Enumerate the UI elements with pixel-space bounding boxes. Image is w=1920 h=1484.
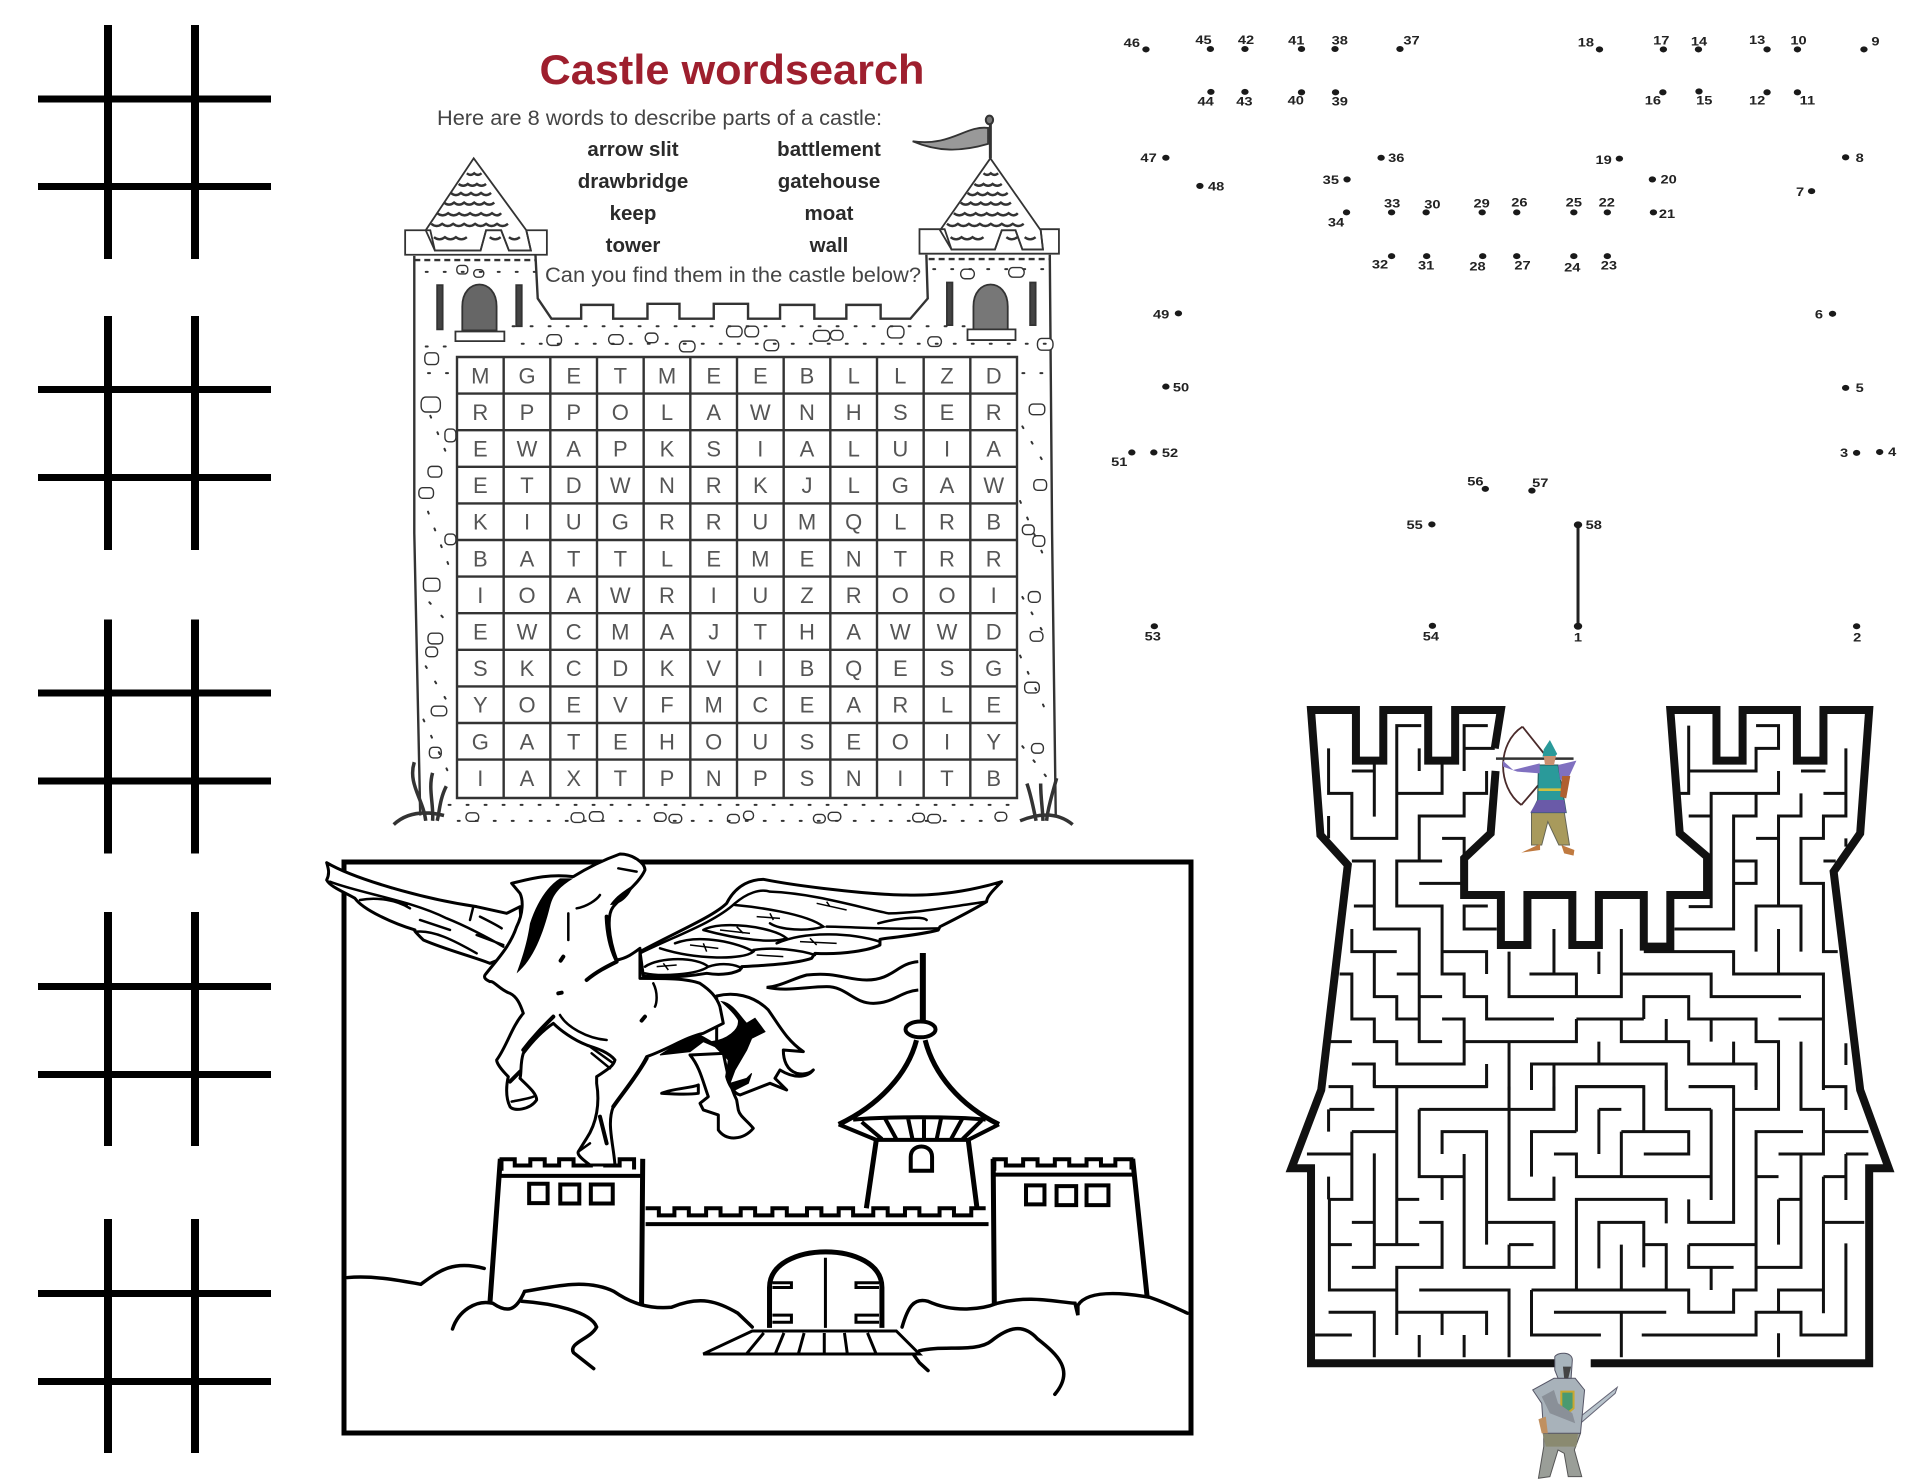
belt and quiver — [1538, 788, 1562, 791]
scabbard — [1538, 1417, 1548, 1433]
numbered dots: 3 — [1840, 446, 1848, 460]
panel: connect the dots — [1111, 33, 1897, 644]
right wing — [640, 879, 1002, 977]
panel: castle wordsearch — [394, 46, 1073, 825]
tail ink mass — [660, 1002, 765, 1090]
numbered dots: 10 — [1790, 34, 1807, 47]
numbered dots: 40 — [1288, 94, 1304, 107]
numbered dots: 7 — [1796, 185, 1804, 199]
word list: tower — [606, 234, 660, 257]
numbered dots: 35 — [1323, 173, 1340, 186]
turret flag — [767, 962, 918, 1003]
cuisses — [1542, 1430, 1578, 1447]
tower caps — [405, 229, 1059, 255]
castle wall speckle — [423, 269, 1048, 821]
numbered dots: 15 — [1696, 94, 1713, 107]
central turret — [866, 1141, 977, 1208]
numbered dots: 56 — [1467, 475, 1484, 488]
helmet — [1543, 740, 1557, 757]
numbered dots: 57 — [1532, 476, 1548, 490]
numbered dots: 53 — [1145, 630, 1161, 643]
numbered dots: 22 — [1599, 196, 1615, 209]
numbered dots: 18 — [1578, 36, 1595, 49]
castle wall outline — [414, 255, 1056, 815]
mane — [517, 878, 573, 973]
numbered dots: 52 — [1162, 446, 1178, 460]
numbered dots: 43 — [1236, 94, 1253, 108]
tail — [717, 994, 813, 1095]
letter grid: SKCDKVIBQESG — [473, 656, 1002, 681]
body — [485, 854, 723, 1165]
tic-tac-toe grid 4 — [38, 912, 271, 1146]
numbered dots: 50 — [1173, 381, 1189, 394]
numbered dots: 27 — [1514, 259, 1531, 272]
panel: pegasus colouring picture — [327, 854, 1191, 1433]
numbered dots: 21 — [1659, 207, 1676, 221]
left reeds — [394, 762, 446, 825]
torso — [1533, 1378, 1585, 1433]
numbered dots: 14 — [1691, 35, 1708, 48]
word list: drawbridge — [578, 170, 688, 193]
numbered dots: 44 — [1198, 94, 1214, 108]
pegasus left wing and body — [327, 854, 723, 1165]
numbered dots: 4 — [1888, 445, 1897, 459]
wordsearch title: Castle wordsearch — [540, 46, 924, 93]
numbered dots: 28 — [1469, 260, 1486, 273]
letter grid: ETDWNRKJLGAW — [473, 473, 1004, 498]
numbered dots: 46 — [1124, 36, 1140, 50]
letter grid: EWCMAJTHAWWD — [473, 620, 1002, 644]
bow — [1503, 727, 1544, 805]
numbered dots: 32 — [1372, 258, 1388, 271]
word list — [578, 138, 881, 257]
numbered dots: 55 — [1406, 518, 1423, 532]
numbered dots: 38 — [1332, 34, 1348, 47]
wordsearch question: Can you find them in the castle below? — [545, 264, 921, 287]
numbered dots: 31 — [1418, 259, 1435, 272]
numbered dots: 6 — [1815, 308, 1823, 321]
numbered dots: 1 — [1574, 631, 1583, 644]
letter grid: KIUGRRUMQLRB — [473, 510, 1001, 535]
left tower roof — [426, 158, 531, 251]
right reeds — [1020, 778, 1073, 825]
tunic — [1532, 765, 1566, 813]
tic-tac-toe grid 5 — [38, 1219, 271, 1453]
castle towers and wall — [490, 953, 1147, 1354]
numbered dots: 47 — [1140, 151, 1157, 165]
letter grid: MGETMEEBLLZD — [471, 363, 1002, 388]
word list: arrow slit — [587, 138, 679, 161]
letter grid lines — [457, 357, 1017, 798]
body ink details — [512, 868, 657, 1152]
stairs — [703, 1331, 919, 1354]
numbered dots: 54 — [1423, 630, 1440, 643]
tic-tac-toe grid 3 — [38, 620, 271, 854]
legs — [1538, 1433, 1582, 1478]
numbered dots: 41 — [1288, 34, 1305, 47]
numbered dots: 24 — [1564, 260, 1581, 274]
spur — [662, 1085, 698, 1094]
arms — [1542, 1390, 1575, 1423]
numbered dots: 11 — [1800, 94, 1816, 107]
numbered dots: 17 — [1653, 34, 1669, 47]
tower windows — [529, 1184, 1108, 1205]
helmet — [1555, 1353, 1572, 1378]
letter grid: IOAWRIUZROOI — [477, 583, 997, 608]
word list: keep — [610, 202, 656, 225]
word list: battlement — [777, 138, 881, 161]
numbered dots: 30 — [1424, 198, 1441, 211]
letter grid: BATTLEMENTRR — [473, 546, 1002, 571]
muzzle shadow — [610, 885, 633, 905]
numbered dots: 12 — [1749, 94, 1765, 107]
panel: castle maze — [1291, 710, 1889, 1478]
numbered dots: 33 — [1384, 197, 1400, 210]
archer — [1496, 727, 1576, 856]
letter grid: RPPOLAWNHSER — [472, 400, 1002, 425]
gate — [770, 1252, 882, 1328]
numbered dots: 58 — [1586, 518, 1602, 532]
numbered dots: 42 — [1238, 33, 1254, 46]
numbered dots: 23 — [1601, 259, 1617, 272]
illustrated castle frame — [394, 116, 1073, 825]
numbered dots: 48 — [1208, 179, 1225, 193]
numbered dots: 25 — [1566, 196, 1583, 209]
hind leg — [690, 1053, 753, 1138]
tic-tac-toe grid 2 — [38, 316, 271, 550]
arms — [1503, 761, 1576, 780]
left wing — [327, 863, 523, 963]
numbered dots: 9 — [1871, 35, 1880, 48]
hills — [348, 1265, 1187, 1394]
numbered dots: 2 — [1853, 631, 1861, 644]
picture frame — [344, 862, 1191, 1433]
sword — [1575, 1387, 1617, 1423]
numbered dots: 8 — [1856, 151, 1864, 165]
maze upper inner walls — [1329, 726, 1846, 1090]
castle stones — [419, 265, 1053, 823]
pegasus hind leg, tail and right wing — [640, 879, 1002, 1138]
numbered dots: 51 — [1111, 455, 1128, 469]
numbered dots: 45 — [1195, 33, 1212, 46]
numbered dots: 26 — [1511, 196, 1528, 209]
numbered dots: 19 — [1596, 153, 1612, 167]
letter grid: GATEHOUSEOIY — [472, 729, 1001, 754]
letter grid: EWAPKSIALUIA — [473, 436, 1001, 462]
wing feather marks — [657, 902, 847, 970]
numbered dots: 39 — [1332, 94, 1348, 108]
letter grid: YOEVFMCEARLE — [473, 693, 1001, 718]
numbered dots: 36 — [1388, 151, 1404, 165]
left window — [437, 284, 522, 341]
legs — [1532, 812, 1569, 845]
numbered dots: 37 — [1403, 34, 1420, 47]
knight — [1533, 1353, 1617, 1478]
numbered dots: 16 — [1645, 94, 1661, 107]
numbered dots: 29 — [1474, 197, 1490, 210]
word list: wall — [809, 234, 848, 257]
numbered dots — [1111, 33, 1897, 644]
numbered dots: 13 — [1749, 33, 1765, 46]
numbered dots: 49 — [1153, 308, 1169, 321]
numbered dots: 5 — [1856, 381, 1864, 395]
letter grid: IAXTPNPSNITB — [477, 766, 1001, 791]
left wing feathers — [330, 882, 503, 953]
tic-tac-toe grid 1 — [38, 25, 271, 259]
shield emblem — [1561, 1392, 1574, 1413]
word list: moat — [805, 202, 854, 225]
wing feathers — [640, 891, 987, 975]
word list: gatehouse — [778, 170, 880, 193]
castle and landscape — [348, 953, 1187, 1394]
numbered dots: 20 — [1660, 173, 1677, 186]
wordsearch intro: Here are 8 words to describe parts of a castle: — [437, 107, 882, 130]
right window — [947, 282, 1036, 340]
letter grid — [471, 363, 1004, 791]
maze lower inner walls — [1307, 1080, 1868, 1357]
started line from 58 to 1 — [1577, 525, 1580, 626]
numbered dots: 34 — [1328, 216, 1345, 229]
maze outer wall — [1291, 710, 1889, 1363]
right tower roof and flag — [913, 116, 1043, 249]
